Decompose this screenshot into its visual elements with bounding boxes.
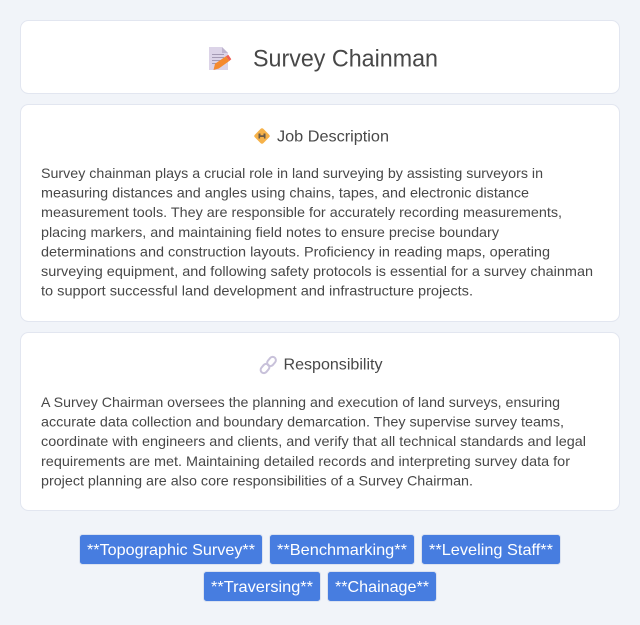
text block: job description: measuring distances and angles using chains, tapes, and electronic distance <box>41 185 529 201</box>
text block: job description: surveying equipment, and following safety protocols is essential for a survey chainman <box>41 263 593 279</box>
text block: job description: to support successful land development and infrastructure projects. <box>41 283 473 299</box>
text block: job description <box>41 165 593 299</box>
tag: topographic survey: **Topographic Survey** <box>87 542 255 559</box>
text block: job description: placing markers, and maintaining field notes to ensure precise boundary <box>41 224 499 240</box>
text block: responsibility: A Survey Chairman oversees the planning and execution of land surveys, ensuring <box>41 394 560 410</box>
text block: responsibility: accurate data collection and boundary demarcation. They supervise survey teams, <box>41 414 564 430</box>
title text: Survey Chainman <box>253 46 438 72</box>
heading: responsibility: Responsibility <box>284 356 382 374</box>
icon: construction diamond <box>254 128 270 144</box>
tag: chainage <box>328 572 436 602</box>
tag: leveling staff: **Leveling Staff** <box>429 542 553 559</box>
text block: responsibility: project planning are also core responsibilities of a Survey Chairman. <box>41 472 473 488</box>
panel: responsibility <box>20 332 620 510</box>
tag: benchmarking: **Benchmarking** <box>277 542 407 559</box>
text block: job description: Survey chainman plays a crucial role in land surveying by assisting surveyors in <box>41 165 543 181</box>
icon: link <box>259 356 277 374</box>
tag: benchmarking <box>270 534 414 564</box>
heading: job description: Job Description <box>277 128 389 146</box>
panel: title <box>20 20 620 94</box>
text block: responsibility: requirements are met. Maintaining detailed records and interpreting survey data for <box>41 453 570 469</box>
tag: leveling staff <box>422 534 560 564</box>
text block: job description: determinations and construction layouts. Proficiency in reading maps, operating <box>41 243 550 259</box>
tag: topographic survey <box>80 534 262 564</box>
text block: responsibility: coordinate with engineers and clients, and verify that all technical standards and legal <box>41 433 586 449</box>
tag: traversing: **Traversing** <box>211 579 313 596</box>
tag: traversing <box>204 572 320 602</box>
text block: responsibility <box>41 394 586 488</box>
tags <box>80 534 560 602</box>
panel: job description <box>20 104 620 322</box>
icon: memo with pencil <box>209 47 231 70</box>
text block: job description: measurement tools. They are responsible for accurately recording measurements, <box>41 204 562 220</box>
tag: chainage: **Chainage** <box>335 579 429 596</box>
